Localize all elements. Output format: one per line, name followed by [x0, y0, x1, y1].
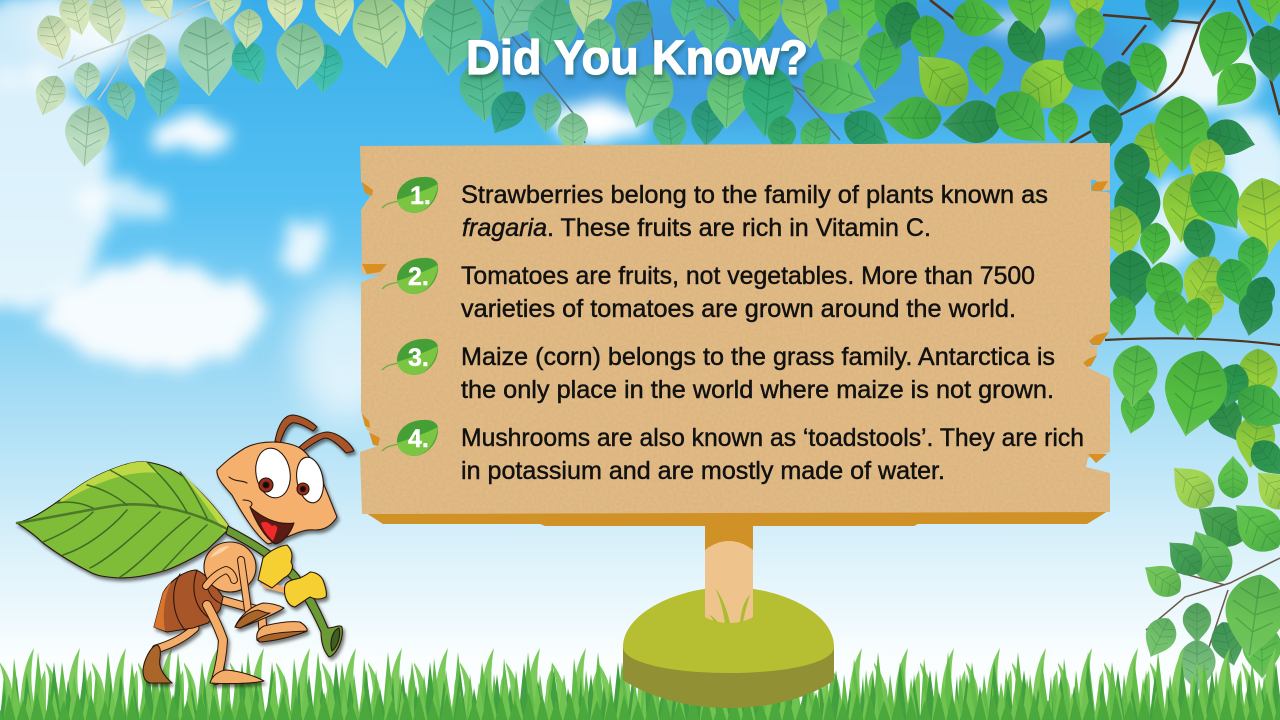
notch wedges	[362, 181, 1109, 463]
leaf stem	[226, 526, 342, 657]
wooden board edge	[363, 511, 1108, 526]
front foot	[235, 603, 284, 628]
fact 2 text: varieties of tomatoes are grown around the world.	[461, 295, 1016, 323]
fact 3 text: the only place in the world where maize is not grown.	[461, 376, 1054, 404]
icon: leaf number 4	[382, 420, 438, 456]
title: Did You Know?	[466, 32, 808, 85]
far legs	[222, 600, 263, 632]
icon: leaf number 2	[382, 258, 438, 294]
near leg	[207, 605, 223, 680]
rear left foot	[143, 645, 172, 683]
fact 1 text: Strawberries belong to the family of plants known as	[461, 181, 1048, 209]
grass mound	[623, 587, 834, 708]
icon: leaf number 3: 3.	[408, 344, 429, 372]
clouds	[0, 0, 1280, 420]
fact 3	[382, 339, 1055, 404]
wrist	[265, 585, 285, 590]
fact 4 text: in potassium and are mostly made of water.	[461, 457, 945, 485]
fact 2 text	[461, 262, 1035, 323]
fact 1 text: fragaria. These fruits are rich in Vitamin C.	[462, 214, 931, 242]
icon: leaf number 4: 4.	[408, 425, 429, 453]
front arm	[206, 560, 248, 610]
mouth	[229, 477, 294, 544]
ant mascot carrying a leaf	[17, 415, 354, 684]
head	[217, 442, 337, 544]
fact 1 text	[461, 181, 1048, 242]
fact 2	[382, 258, 1035, 323]
fact 4	[382, 420, 1084, 485]
yellow gloves	[258, 545, 326, 607]
grass	[0, 640, 1280, 720]
near foot	[210, 670, 264, 684]
icon: leaf number 1: 1.	[410, 182, 431, 210]
fact 3 text: Maize (corn) belongs to the grass family. Antarctica is	[461, 343, 1055, 371]
foliage: top canopy	[418, 0, 906, 162]
abdomen	[154, 570, 223, 632]
foliage: right middle leaves	[1105, 282, 1280, 485]
icon: leaf number 2: 2.	[408, 263, 429, 291]
icon: leaf number 1	[382, 177, 438, 213]
stem end	[331, 628, 340, 651]
icon: leaf number 3	[382, 339, 438, 375]
foliage: top right branches and leaves	[869, 0, 1280, 319]
far foot	[257, 622, 307, 642]
post	[705, 520, 753, 623]
thorax	[204, 542, 256, 592]
foliage: lower right leaves	[1136, 455, 1280, 692]
fact 2 text: Tomatoes are fruits, not vegetables. More than 7500	[461, 262, 1035, 290]
antennae	[275, 415, 354, 454]
fact 3 text	[461, 343, 1055, 404]
big green leaf	[17, 462, 267, 578]
signpost	[360, 143, 1110, 708]
fact 1	[382, 177, 1048, 242]
eyes	[252, 445, 327, 505]
foliage: pale top-left leaves	[28, 0, 451, 169]
fact 4 text	[461, 424, 1084, 485]
wooden board	[360, 143, 1110, 514]
rear left leg	[156, 628, 195, 649]
fact 4 text: Mushrooms are also known as ‘toadstools’. They are rich	[461, 424, 1084, 452]
